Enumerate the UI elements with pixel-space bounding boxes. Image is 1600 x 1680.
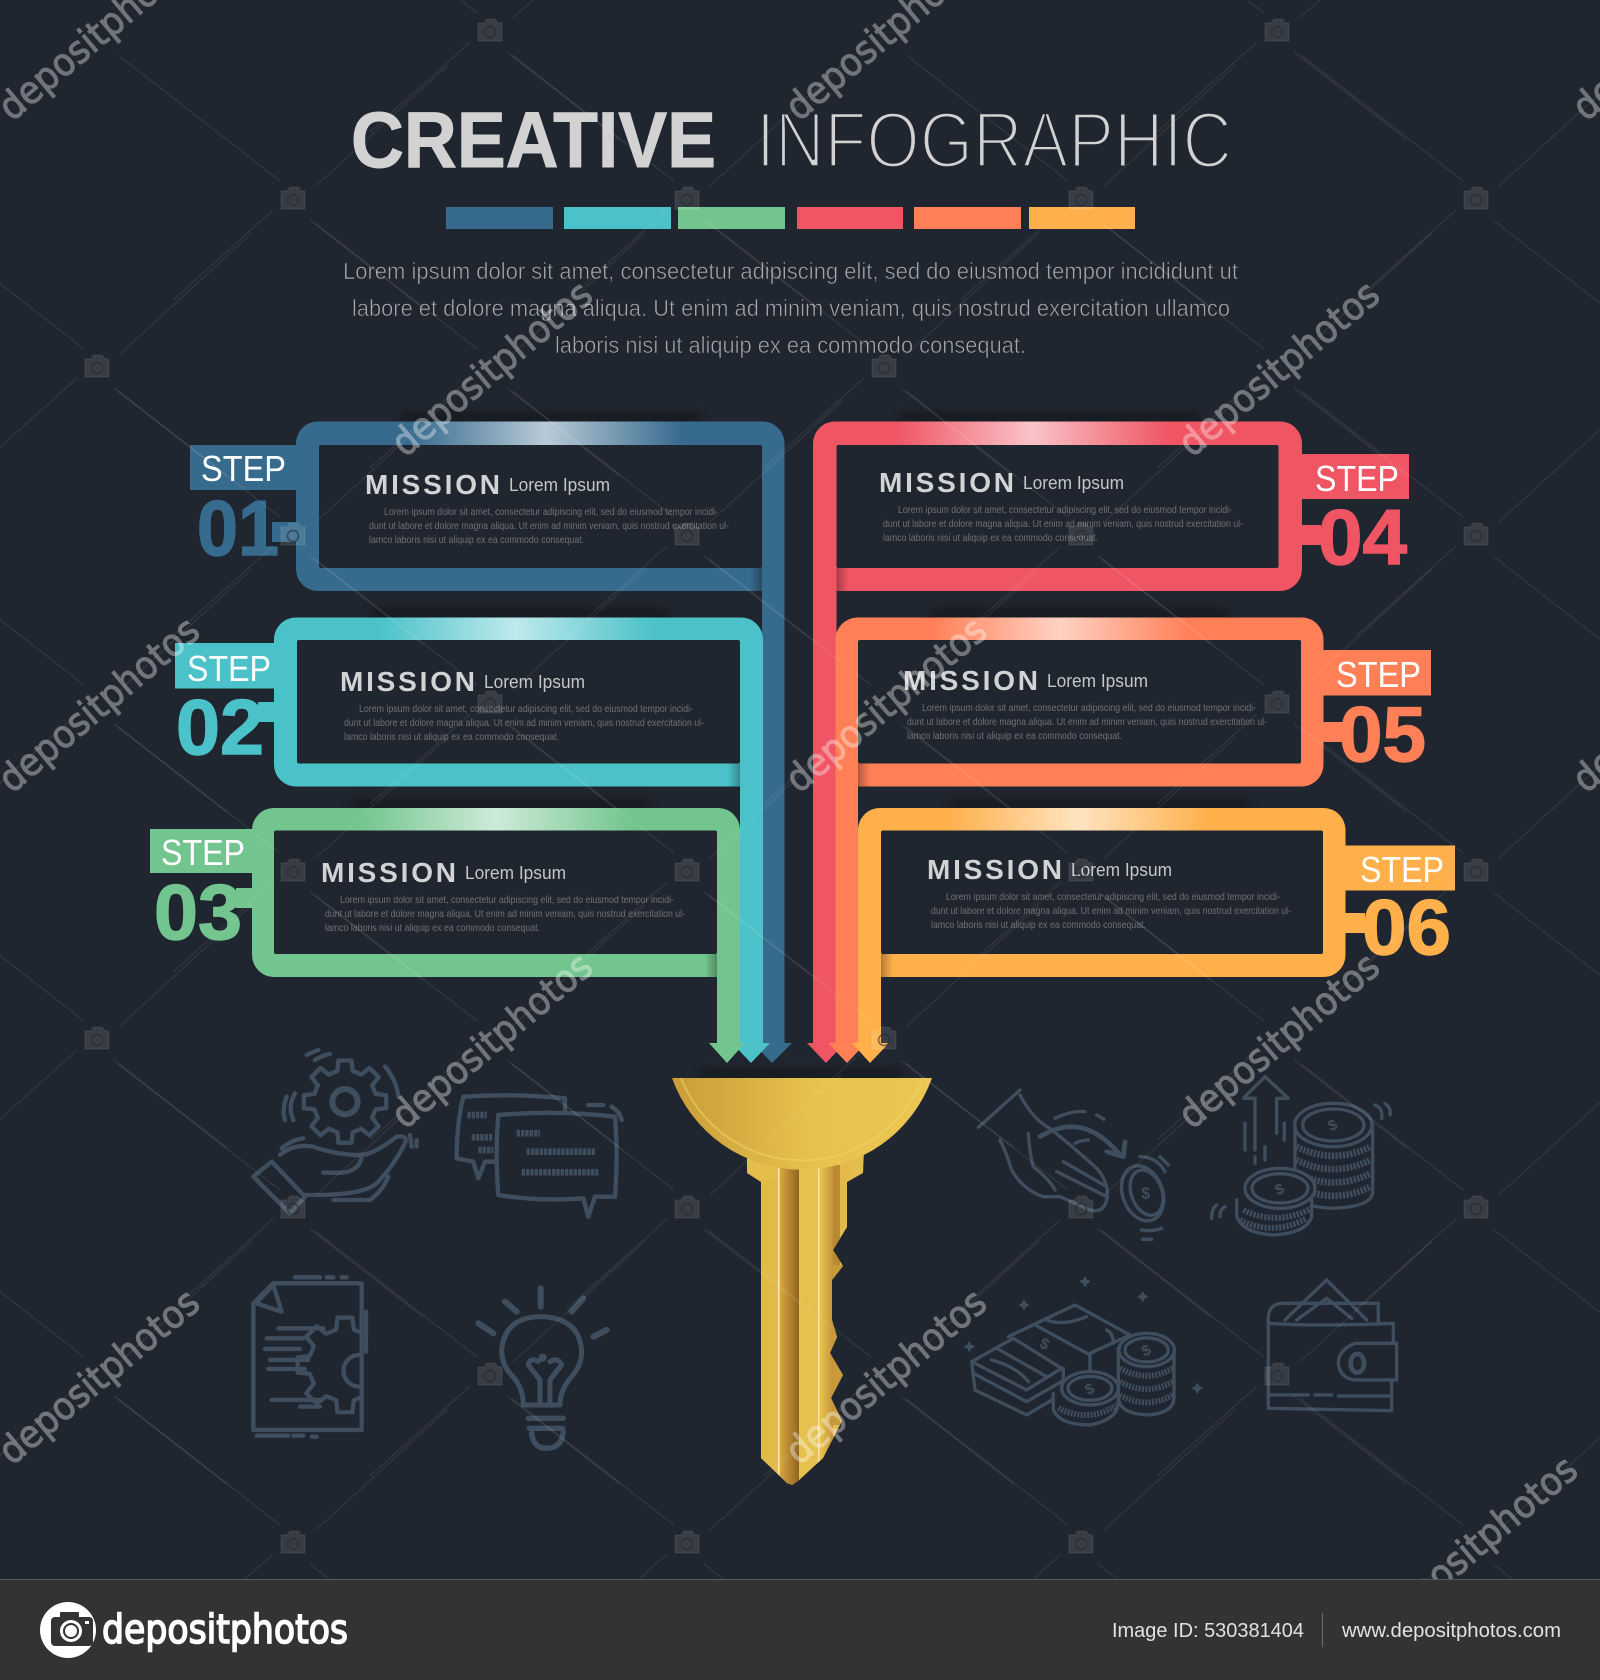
step 04 text: lamco laboris nisi ut aliquip ex ea commodo consequat. xyxy=(883,532,1098,544)
colour bars xyxy=(446,207,1135,229)
icon: light bulb xyxy=(478,1288,607,1448)
step 05 text: Lorem Ipsum xyxy=(1047,671,1148,691)
watermark wordmarks: depositphotos xyxy=(1170,272,1388,465)
step 06 frame and stem xyxy=(858,808,1346,1045)
step 04 text: dunt ut labore et dolore magna aliqua. Ut enim ad minim veniam, quis nostrud exercitation ul- xyxy=(883,518,1243,530)
step 04 number: 04 xyxy=(1318,493,1407,581)
step 03 text: Lorem Ipsum xyxy=(465,863,566,883)
icon: money and coins: $ xyxy=(1037,1335,1052,1354)
watermark wordmarks: depositphotos xyxy=(777,1280,995,1473)
step 06 label: STEP xyxy=(1360,849,1444,890)
key blade xyxy=(747,1155,864,1485)
step 02 label: STEP xyxy=(187,648,271,689)
step 06 text: lamco laboris nisi ut aliquip ex ea commodo consequat. xyxy=(931,919,1146,931)
step 05 label: STEP xyxy=(1336,654,1421,695)
arrow heads into key xyxy=(709,1043,889,1063)
step 03 text: MISSION xyxy=(321,857,456,888)
intro paragraph xyxy=(343,258,1239,358)
step 05 text: MISSION xyxy=(903,665,1038,696)
step 01 text: dunt ut labore et dolore magna aliqua. Ut enim ad minim veniam, quis nostrud exercitation ul- xyxy=(369,520,729,532)
panel: step 01 xyxy=(190,422,784,1045)
step 02 text: lamco laboris nisi ut aliquip ex ea commodo consequat. xyxy=(344,731,559,743)
step 03 text xyxy=(321,857,685,934)
step 06 text: Lorem Ipsum xyxy=(1071,860,1172,880)
step 01 number: 01 xyxy=(197,484,279,572)
step 03 label: STEP xyxy=(161,832,245,873)
frame shadows xyxy=(350,415,1250,1078)
step 06 text: Lorem ipsum dolor sit amet, consectetur adipiscing elit, sed do eiusmod tempor incidi- xyxy=(946,891,1280,903)
step 01 text: Lorem ipsum dolor sit amet, consectetur adipiscing elit, sed do eiusmod tempor incidi- xyxy=(384,506,718,518)
panel: step 05 xyxy=(836,618,1431,1045)
step 05 frame and stem xyxy=(836,618,1324,1045)
intro paragraph: laboris nisi ut aliquip ex ea commodo consequat. xyxy=(555,332,1026,358)
icon: wallet xyxy=(1268,1280,1397,1411)
step 03 number: 03 xyxy=(154,868,242,956)
step 05 text xyxy=(903,665,1267,742)
dollar signs xyxy=(1272,1116,1341,1199)
step 02 number: 02 xyxy=(176,683,264,771)
step 02 text: Lorem Ipsum xyxy=(484,672,585,692)
icon: money and coins: $ xyxy=(1139,1341,1154,1361)
dollar sign: $ xyxy=(1141,1186,1150,1203)
step 04 text: MISSION xyxy=(879,467,1014,498)
step 01 label: STEP xyxy=(201,448,286,489)
step 03 text: Lorem ipsum dolor sit amet, consectetur adipiscing elit, sed do eiusmod tempor incidi- xyxy=(340,894,674,906)
step 02 tab xyxy=(175,643,275,688)
dollar signs: $ xyxy=(1325,1116,1341,1135)
step 04 frame and stem xyxy=(813,422,1302,1045)
step 05 number: 05 xyxy=(1339,690,1426,778)
step 04 label: STEP xyxy=(1315,458,1399,499)
key bow xyxy=(672,1078,932,1170)
step 02 text: MISSION xyxy=(340,666,475,697)
step 01 text: MISSION xyxy=(365,469,500,500)
intro paragraph: labore et dolore magna aliqua. Ut enim ad minim veniam, quis nostrud exercitation ullamco xyxy=(352,295,1230,321)
step 01 frame and stem xyxy=(296,422,784,1045)
intro paragraph: Lorem ipsum dolor sit amet, consectetur adipiscing elit, sed do eiusmod tempor incididunt ut xyxy=(343,258,1239,284)
watermark wordmarks: depositphotos xyxy=(1170,944,1388,1137)
step 06 text xyxy=(927,854,1291,931)
icon: golden key xyxy=(672,1078,932,1490)
icon: footer camera logo xyxy=(40,1602,96,1658)
step 04 text xyxy=(879,467,1243,544)
step 06 text: dunt ut labore et dolore magna aliqua. Ut enim ad minim veniam, quis nostrud exercitation ul- xyxy=(931,905,1291,917)
step 06 number: 06 xyxy=(1362,883,1451,971)
step 04 tab xyxy=(1301,454,1409,499)
watermark wordmarks: depositphotos xyxy=(777,608,995,801)
step 05 text: lamco laboris nisi ut aliquip ex ea commodo consequat. xyxy=(907,730,1122,742)
panel: step 06 xyxy=(858,808,1455,1045)
step 02 text: dunt ut labore et dolore magna aliqua. Ut enim ad minim veniam, quis nostrud exercitation ul- xyxy=(344,717,704,729)
icon: money and coins xyxy=(965,1277,1202,1425)
image id: Image ID: 530381404 xyxy=(1112,1620,1304,1642)
icon: money and coins: $ xyxy=(1082,1380,1098,1399)
step 01 text: lamco laboris nisi ut aliquip ex ea commodo consequat. xyxy=(369,534,584,546)
title bold word: CREATIVE xyxy=(351,95,716,184)
step 05 text: dunt ut labore et dolore magna aliqua. Ut enim ad minim veniam, quis nostrud exercitation ul- xyxy=(907,716,1267,728)
footer url: www.depositphotos.com xyxy=(1341,1620,1561,1642)
dollar signs: $ xyxy=(1272,1180,1288,1199)
footer bar xyxy=(0,1579,1600,1680)
title xyxy=(351,95,1232,184)
step 03 text: lamco laboris nisi ut aliquip ex ea commodo consequat. xyxy=(325,922,540,934)
icon: chat bubbles xyxy=(457,1095,622,1217)
step 01 text xyxy=(365,469,729,546)
footer wordmark: depositphotos xyxy=(102,1607,348,1653)
step 06 text: MISSION xyxy=(927,854,1062,885)
panel: step 02 xyxy=(175,618,763,1045)
panel: step 04 xyxy=(813,422,1409,1045)
step 05 tab xyxy=(1323,650,1431,696)
watermark wordmarks: depositphotos xyxy=(383,944,601,1137)
step 02 text: Lorem ipsum dolor sit amet, consectetur adipiscing elit, sed do eiusmod tempor incidi- xyxy=(359,703,693,715)
step 02 frame and stem xyxy=(274,618,763,1045)
step 03 tab xyxy=(150,829,252,873)
icon: document with gear xyxy=(251,1275,368,1439)
step 02 text xyxy=(340,666,704,743)
watermark wordmarks: depositphotos xyxy=(1368,1447,1586,1640)
step 05 text: Lorem ipsum dolor sit amet, consectetur adipiscing elit, sed do eiusmod tempor incidi- xyxy=(922,702,1256,714)
icon: rising coin stacks xyxy=(1212,1077,1390,1235)
title light word: INFOGRAPHIC xyxy=(756,95,1232,184)
step 01 tab xyxy=(190,445,297,490)
icon: hand dropping coin xyxy=(978,1090,1171,1239)
watermark wordmarks: depositphotos xyxy=(383,272,601,465)
step 01 text: Lorem Ipsum xyxy=(509,475,610,495)
step 06 tab xyxy=(1345,846,1455,890)
step 04 text: Lorem ipsum dolor sit amet, consectetur adipiscing elit, sed do eiusmod tempor incidi- xyxy=(898,504,1232,516)
step 04 text: Lorem Ipsum xyxy=(1023,473,1124,493)
icon: hand with gear xyxy=(253,1050,417,1213)
step 03 text: dunt ut labore et dolore magna aliqua. Ut enim ad minim veniam, quis nostrud exercitation ul- xyxy=(325,908,685,920)
step 03 frame and stem xyxy=(252,808,740,1045)
panel: step 03 xyxy=(150,808,740,1045)
